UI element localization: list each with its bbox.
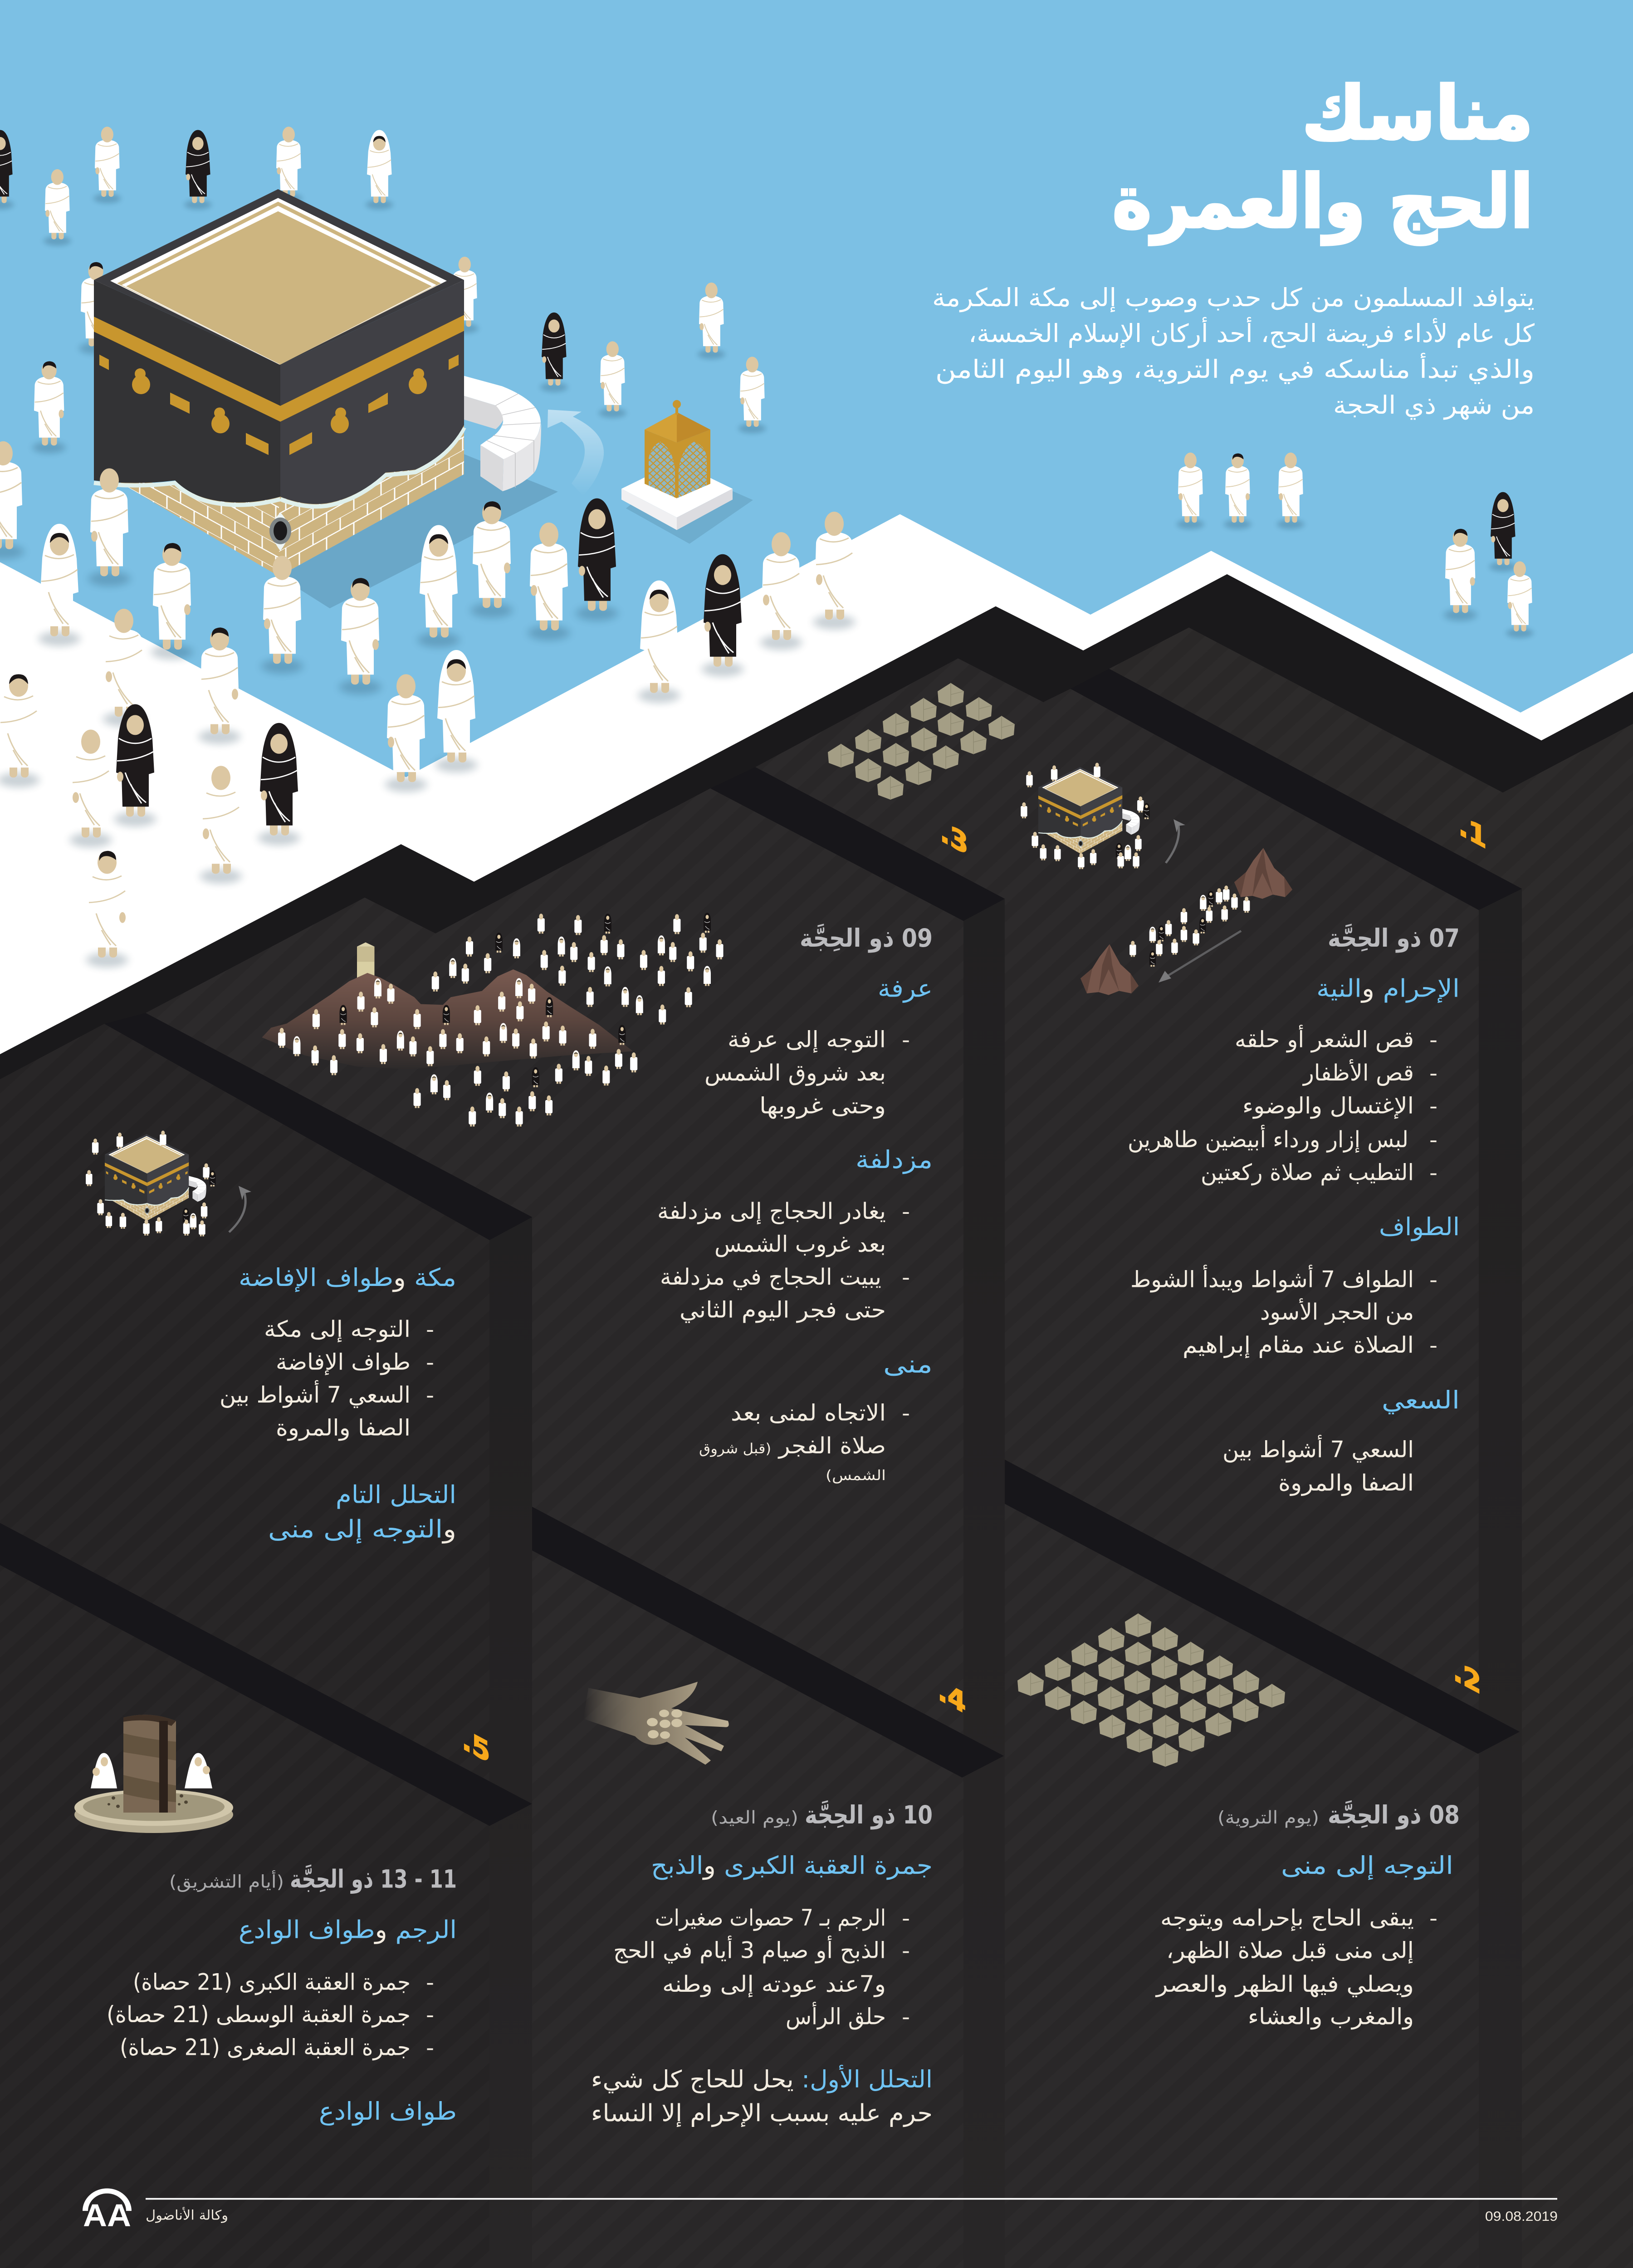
agency name: وكالة الأناضول [146, 2207, 228, 2223]
panel: step 2 text, 08 Dhu al-Hijjah: يبقى الحاج بإحرامه ويتوجه [1160, 1905, 1414, 1931]
pilgrims around mini Kaaba step 3 [86, 1131, 216, 1237]
panel: step 1 text, 07 Dhu al-Hijjah: قص الأظفار [1302, 1059, 1414, 1086]
panel: step 1 text, 07 Dhu al-Hijjah: - [1429, 1094, 1437, 1119]
intro paragraph: والذي تبدأ مناسكه في يوم التروية، وهو اليوم الثامن [935, 353, 1535, 385]
panel: step 1 text, 07 Dhu al-Hijjah: 07 ذو الحِجَّة [1328, 924, 1460, 953]
panel: step 2 text, 08 Dhu al-Hijjah: - [1429, 1906, 1437, 1931]
arrow: tawaf mini step 1 [1166, 819, 1185, 863]
panel: step 3 text, 09 Dhu al-Hijjah: وحتى غروبها [759, 1093, 886, 1119]
pilgrims in front of the Kaaba [0, 361, 855, 968]
mountain: Safa [1081, 944, 1139, 995]
panel: step 1 text, 07 Dhu al-Hijjah: الطواف [1379, 1212, 1460, 1241]
panel: step 2 text, 08 Dhu al-Hijjah: (يوم التروية) [1217, 1807, 1319, 1828]
date: 09.08.2019 [1485, 2209, 1558, 2224]
panel: step 1 text, 07 Dhu al-Hijjah: - [1429, 1128, 1437, 1152]
panel: step 3 text, 09 Dhu al-Hijjah: عرفة [878, 974, 933, 1003]
panel: step 3 text, 09 Dhu al-Hijjah: - [902, 1200, 910, 1224]
panel: step 2 text, 08 Dhu al-Hijjah: ويصلي فيها الظهر والعصر [1155, 1971, 1414, 1997]
panel: step 1 text, 07 Dhu al-Hijjah: لبس إزار ورداء أبيضين طاهرين [1128, 1124, 1408, 1153]
panel: step 1 text, 07 Dhu al-Hijjah: من الحجر الأسود [1260, 1298, 1414, 1325]
icon: mini Kaaba step 1 [1038, 767, 1140, 854]
panel: step 5 text, 11-13 Dhu al-Hijjah: جمرة العقبة الصغرى (21 حصاة) [120, 2035, 411, 2061]
panel: step 5 text, 11-13 Dhu al-Hijjah: جمرة العقبة الوسطى (21 حصاة) [107, 2002, 411, 2028]
panel: step 3 text, 09 Dhu al-Hijjah: يغادر الحجاج إلى مزدلفة [657, 1198, 886, 1224]
panel: step 4 text, 10 Dhu al-Hijjah: جمرة العقبة الكبرى والذبح [651, 1851, 933, 1880]
panel: step 3 text, 09 Dhu al-Hijjah: - [902, 1266, 910, 1290]
panel: step 5 text, 11-13 Dhu al-Hijjah [107, 1865, 457, 2126]
panel: step 4 text, 10 Dhu al-Hijjah: - [902, 1906, 910, 1931]
panel: step 1 text, 07 Dhu al-Hijjah: السعي 7 أشواط بين [1222, 1435, 1414, 1463]
panel: step 3 continued, Makkah and Tawaf al-Ifadah: والتوجه إلى منى [268, 1515, 456, 1544]
panel: step 4 text, 10 Dhu al-Hijjah: (يوم العيد) [711, 1807, 798, 1828]
footer rule [146, 2198, 1557, 2200]
icon: tents of Mina [1017, 1613, 1285, 1767]
icon: Maqam Ibrahim [621, 400, 753, 544]
panel: step 3 text, 09 Dhu al-Hijjah: الشمس) [826, 1467, 886, 1484]
panel: step 3 text, 09 Dhu al-Hijjah: مزدلفة [856, 1145, 933, 1174]
step number 3: .3 [940, 814, 968, 862]
panel: step 3 text, 09 Dhu al-Hijjah: - [902, 1028, 910, 1052]
panel: step 3 continued, Makkah and Tawaf al-Ifadah: الصفا والمروة [276, 1415, 411, 1441]
panel: step 3 text, 09 Dhu al-Hijjah: منى [883, 1350, 933, 1378]
panel: step 5 text, 11-13 Dhu al-Hijjah: جمرة العقبة الكبرى (21 حصاة) [133, 1969, 411, 1995]
panel: step 3 text, 09 Dhu al-Hijjah: بعد غروب الشمس [714, 1232, 886, 1257]
panel: step 1 text, 07 Dhu al-Hijjah: - [1429, 1268, 1437, 1292]
panel: step 5 text, 11-13 Dhu al-Hijjah: - [426, 1970, 434, 1995]
panel: step 3 continued, Makkah and Tawaf al-Ifadah: التحلل التام [336, 1481, 456, 1509]
panel: step 3 text, 09 Dhu al-Hijjah: بعد شروق الشمس [704, 1060, 886, 1086]
shadow of the Kaaba [279, 454, 558, 608]
step number 1: .1 [1458, 808, 1486, 855]
panel: step 2 text, 08 Dhu al-Hijjah: والمغرب والعشاء [1248, 2004, 1414, 2030]
pilgrims behind the Kaaba [0, 127, 766, 433]
panel: step 3 text, 09 Dhu al-Hijjah: التوجه إلى عرفة [728, 1027, 886, 1053]
panel: step 1 text, 07 Dhu al-Hijjah: الصفا والمروة [1278, 1470, 1414, 1496]
icon: hand holding pebbles [583, 1682, 729, 1765]
panel: step 4 text, 10 Dhu al-Hijjah: و7عند عودته إلى وطنه [662, 1971, 886, 1997]
intro paragraph: يتوافد المسلمون من كل حدب وصوب إلى مكة المكرمة [932, 283, 1535, 313]
panel: step 1 text, 07 Dhu al-Hijjah: الإحرام والنية [1316, 974, 1460, 1003]
panel: step 3 text, 09 Dhu al-Hijjah [657, 924, 933, 1484]
panel: step 4 text, 10 Dhu al-Hijjah: الذبح أو صيام 3 أيام في الحج [613, 1936, 886, 1964]
panel: step 3 text, 09 Dhu al-Hijjah: حتى فجر اليوم الثاني [680, 1297, 886, 1323]
title: الحج والعمرة [1112, 159, 1533, 245]
white mountain band [0, 514, 1633, 2268]
icon: mini Kaaba step 3 [105, 1134, 206, 1221]
arrow: tawaf mini step 3 [229, 1186, 251, 1232]
panel: step 4 text, 10 Dhu al-Hijjah: حلق الرأس [786, 2002, 886, 2030]
panel: step 4 text, 10 Dhu al-Hijjah: الرجم بـ 7 حصوات صغيرات [655, 1905, 886, 1931]
intro paragraph: كل عام لأداء فريضة الحج، أحد أركان الإسلام الخمسة، [968, 317, 1535, 349]
panel: step 1 text, 07 Dhu al-Hijjah: - [1429, 1334, 1437, 1358]
panel: step 4 text, 10 Dhu al-Hijjah [591, 1800, 933, 2127]
logo: Anadolu Agency: AA [83, 2198, 131, 2233]
arrow: tawaf direction [548, 410, 604, 496]
icon: Mount Arafat with crowd [262, 914, 637, 1126]
panel: step 1 text, 07 Dhu al-Hijjah: قص الشعر أو حلقه [1235, 1025, 1414, 1053]
panel: step 3 text, 09 Dhu al-Hijjah: صلاة الفجر (قبل شروق [699, 1433, 886, 1459]
dark isometric panels [0, 574, 1633, 2268]
panel: step 1 text, 07 Dhu al-Hijjah: - [1429, 1061, 1437, 1085]
panel: step 1 text, 07 Dhu al-Hijjah: - [1429, 1028, 1437, 1052]
panel: step 3 text, 09 Dhu al-Hijjah: - [902, 1401, 910, 1426]
step number 4: .4 [938, 1673, 966, 1721]
panel: step 3 continued, Makkah and Tawaf al-Ifadah: - [426, 1350, 434, 1375]
pilgrims around mini Kaaba and between Safa and Marwa [1021, 763, 1250, 967]
panel: step 1 text, 07 Dhu al-Hijjah: - [1429, 1161, 1437, 1185]
title: مناسك [1302, 71, 1533, 156]
pilgrims on the right [1177, 453, 1533, 638]
panel: step 1 text, 07 Dhu al-Hijjah: الطواف 7 أشواط ويبدأ الشوط [1130, 1265, 1414, 1293]
panel: step 2 text, 08 Dhu al-Hijjah: إلى منى قبل صلاة الظهر، [1166, 1938, 1414, 1964]
panel: step 1 text, 07 Dhu al-Hijjah: الإغتسال والوضوء [1242, 1093, 1414, 1119]
panel: step 3 continued, Makkah and Tawaf al-Ifadah: مكة وطواف الإفاضة [239, 1263, 456, 1292]
title [1112, 71, 1533, 245]
panel: step 3 continued, Makkah and Tawaf al-Ifadah: طواف الإفاضة [276, 1349, 411, 1375]
panel: step 3 continued, Makkah and Tawaf al-Ifadah: التوجه إلى مكة [264, 1316, 411, 1342]
panel: step 1 text, 07 Dhu al-Hijjah: الصلاة عند مقام إبراهيم [1183, 1332, 1414, 1358]
panel: step 3 continued, Makkah and Tawaf al-Ifadah: - [426, 1383, 434, 1408]
crowd at Arafat, right part [636, 913, 724, 1025]
mountain: Marwa [1234, 848, 1292, 899]
panel: step 2 text, 08 Dhu al-Hijjah [1155, 1800, 1460, 2030]
panel: step 4 text, 10 Dhu al-Hijjah: 10 ذو الحِجَّة [805, 1800, 933, 1830]
panel: step 3 text, 09 Dhu al-Hijjah: يبيت الحجاج في مزدلفة [660, 1264, 881, 1290]
icon: Jamarat pillar [74, 1715, 233, 1833]
panel: step 3 text, 09 Dhu al-Hijjah: الاتجاه لمنى بعد [731, 1400, 886, 1426]
panel: step 5 text, 11-13 Dhu al-Hijjah: - [426, 2036, 434, 2060]
panel: step 3 continued, Makkah and Tawaf al-Ifadah: السعي 7 أشواط بين [220, 1380, 411, 1408]
panel: step 5 text, 11-13 Dhu al-Hijjah: الرجم وطواف الوادع [239, 1916, 457, 1944]
icon: tents of Arafat camp [828, 683, 1015, 800]
panel: step 4 text, 10 Dhu al-Hijjah: التحلل الأول: يحل للحاج كل شيء [591, 2065, 933, 2094]
intro paragraph [932, 283, 1535, 420]
panel: step 5 text, 11-13 Dhu al-Hijjah: (أيام التشريق) [169, 1870, 284, 1892]
step number 2: .2 [1453, 1653, 1481, 1701]
panel: step 3 continued, Makkah and Tawaf al-Ifadah: - [426, 1318, 434, 1342]
arrow: sai direction [1159, 931, 1241, 982]
panel: step 4 text, 10 Dhu al-Hijjah: - [902, 1939, 910, 1963]
panel: step 1 text, 07 Dhu al-Hijjah [1128, 924, 1460, 1496]
panel: step 2 text, 08 Dhu al-Hijjah: 08 ذو الحِجَّة [1328, 1800, 1460, 1830]
icon: Kaaba [94, 189, 541, 576]
panel: step 3 continued, Makkah and Tawaf al-Ifadah [220, 1263, 456, 1544]
panel: step 4 text, 10 Dhu al-Hijjah: - [902, 2005, 910, 2029]
step number 5: .5 [462, 1722, 490, 1769]
panel: step 1 text, 07 Dhu al-Hijjah: السعي [1382, 1386, 1460, 1414]
panel: step 2 text, 08 Dhu al-Hijjah: التوجه إلى منى [1281, 1851, 1453, 1880]
panel: step 5 text, 11-13 Dhu al-Hijjah: - [426, 2003, 434, 2028]
panel: step 5 text, 11-13 Dhu al-Hijjah: طواف الوادع [319, 2097, 457, 2126]
panel: step 1 text, 07 Dhu al-Hijjah: التطيب ثم صلاة ركعتين [1201, 1160, 1414, 1186]
panel: step 5 text, 11-13 Dhu al-Hijjah: 11 - 13 ذو الحِجَّة [290, 1865, 457, 1894]
panel: step 3 text, 09 Dhu al-Hijjah: 09 ذو الحِجَّة [800, 924, 933, 953]
intro paragraph: من شهر ذي الحجة [1333, 391, 1535, 420]
panel: step 4 text, 10 Dhu al-Hijjah: حرم عليه بسبب الإحرام إلا النساء [591, 2099, 933, 2127]
